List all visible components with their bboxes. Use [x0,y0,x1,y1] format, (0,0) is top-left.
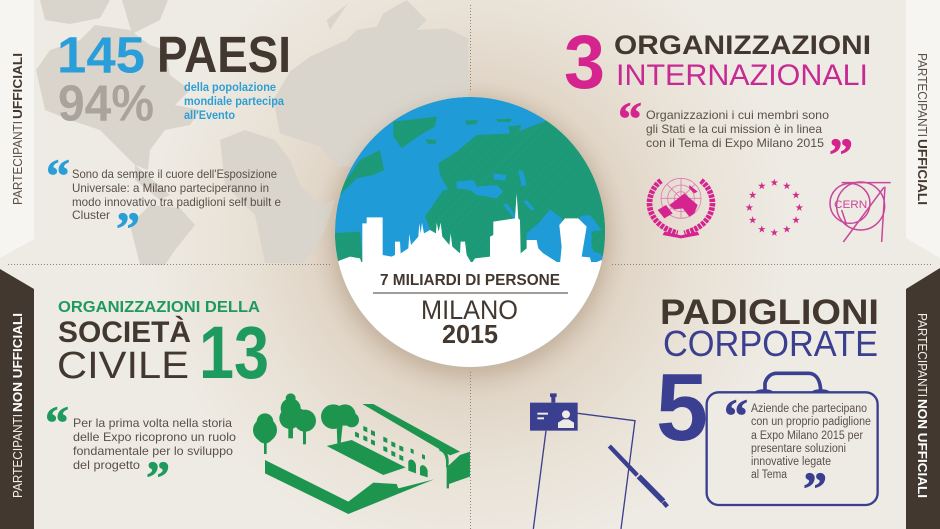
quote: organizzazioni: con il Tema di Expo Milano 2015 [646,136,824,150]
icon: European stars [746,179,803,236]
globe seas [457,170,603,267]
population caption: all'Evento [184,110,235,122]
number 5: 5 [656,354,708,461]
population caption [184,82,285,122]
quote: societa civile: del progetto [73,458,140,472]
heading internazionali: INTERNAZIONALI [616,59,868,92]
heading societa: SOCIETÀ [58,315,191,349]
quote: paesi: Universale: a Milano parteciperanno in [72,181,269,195]
briefcase callout: ” [803,463,827,516]
heading corporate: CORPORATE [663,323,878,364]
globe badge [330,97,617,373]
background world map [36,0,468,265]
icon: green building and trees [253,393,470,514]
caption: 2015: 2015 [442,319,498,349]
heading padiglioni: PADIGLIONI [660,293,879,332]
panel: societa civile [45,299,470,514]
quote: organizzazioni: “ [618,93,642,146]
icon: UN emblem [650,178,712,238]
quote: societa civile: ” [146,452,170,505]
quote: paesi: ” [116,203,140,256]
population caption: mondiale partecipa [184,96,285,108]
quote: societa civile [45,397,236,505]
right band: partecipanti non ufficiali: NON UFFICIALI [915,399,929,498]
quote: paesi: “ [46,150,70,203]
quote: paesi [46,150,281,256]
quote: paesi: modo innovativo tra padiglioni self built e [72,195,281,209]
left band: partecipanti ufficiali: UFFICIALI [11,53,25,119]
icon: badge, lanyard and pen [530,393,667,529]
briefcase callout: a Expo Milano 2015 per [751,430,863,442]
quote: paesi: Cluster [72,208,110,222]
skyline [330,193,610,270]
quote: societa civile: fondamentale per lo sviluppo [73,444,233,458]
icon: CERN logo: CERN [834,199,867,211]
quote: organizzazioni: gli Stati e la cui mission è in linea [646,122,822,136]
right band: partecipanti ufficiali: UFFICIALI [915,139,929,205]
quote: organizzazioni: Organizzazioni i cui membri sono [646,108,829,122]
quote: paesi: Sono da sempre il cuore dell'Esposizione [72,167,277,181]
number 3: 3 [564,20,605,105]
left band: partecipanti non ufficiali: PARTECIPANTI [11,414,25,498]
left band: partecipanti ufficiali: PARTECIPANTI [11,121,25,205]
briefcase callout: Aziende che partecipano [751,403,867,415]
caption: 7 miliardi di persone: 7 MILIARDI DI PERSONE [380,272,560,289]
panel: padiglioni corporate [530,293,879,529]
right band: partecipanti non ufficiali [906,268,940,529]
number 94%: 94% [58,74,154,132]
briefcase callout: innovative legate [751,456,831,468]
quote: organizzazioni [618,93,853,182]
heading organizzazioni della: ORGANIZZAZIONI DELLA [58,299,260,316]
globe land masses: south [330,153,617,267]
number 13: 13 [199,311,269,394]
left band: partecipanti non ufficiali [0,269,34,529]
briefcase callout: presentare soluzioni [751,443,846,455]
panel: 3 organizzazioni internazionali [564,20,891,242]
right band: partecipanti non ufficiali: PARTECIPANTI [915,313,929,397]
quote: societa civile: Per la prima volta nella storia [73,416,232,430]
logos [650,178,891,242]
briefcase callout [707,373,878,516]
briefcase callout: al Tema [751,469,788,481]
left band: partecipanti ufficiali [0,0,34,258]
globe land masses: north [338,117,613,233]
quote: societa civile: delle Expo ricoprono un ruolo [73,430,236,444]
briefcase callout: “ [724,390,748,443]
number 145: 145 [57,26,145,84]
caption: milano: MILANO [421,295,518,325]
right band: partecipanti ufficiali [906,0,940,258]
quote: societa civile: “ [45,397,69,450]
icon: CERN logo [830,182,891,242]
heading paesi: PAESI [157,26,291,83]
right band: partecipanti ufficiali: PARTECIPANTI [915,53,929,137]
briefcase callout: con un proprio padiglione [751,416,871,428]
heading civile: CIVILE [57,345,189,387]
left band: partecipanti non ufficiali: NON UFFICIALI [11,313,25,412]
population caption: della popolazione [184,82,276,94]
heading organizzazioni: ORGANIZZAZIONI [614,30,871,60]
panel: 145 paesi [46,26,291,256]
quote: organizzazioni: ” [829,129,853,182]
